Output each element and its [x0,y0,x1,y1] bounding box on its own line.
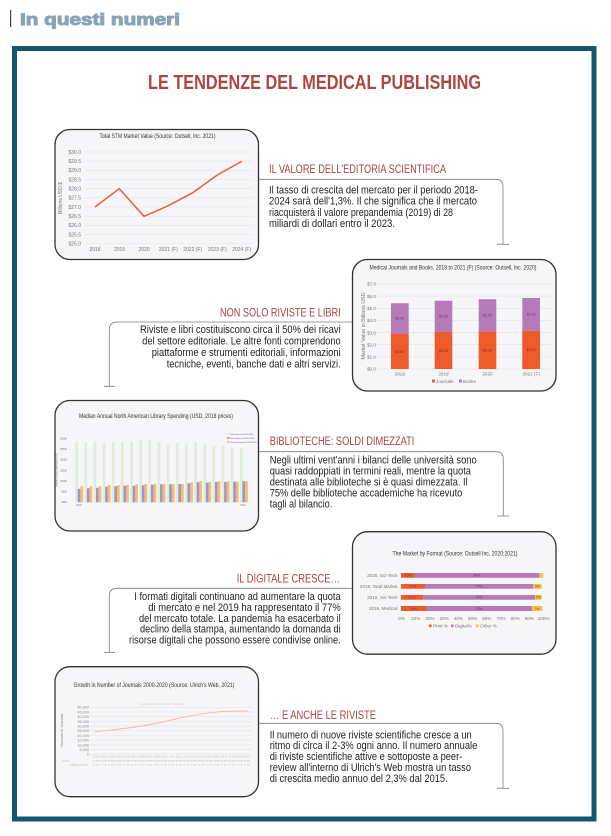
stacked horizontal bar chart [360,573,549,629]
stacked horizontal bar chart: 18% [410,607,417,611]
stacked bar chart: $2.0 [367,342,376,347]
line chart: 2021 (F) [159,247,178,253]
grouped bar chart: $1000 [60,480,68,483]
line chart with data table: 30,000 [77,724,89,728]
stacked horizontal bar chart: 6% [535,585,540,589]
text block: e anche le riviste: … E ANCHE LE RIVISTE [270,708,376,722]
stacked horizontal bar chart: 70% [496,616,506,621]
line chart: $29.0 [68,168,81,174]
line chart: $27.5 [68,196,81,202]
line chart with data table: 25,000 [77,729,89,733]
stacked horizontal bar chart: 50% [468,616,477,621]
text block: il digitale cresce: IL DIGITALE CRESCE… [237,571,340,585]
stacked horizontal bar chart: 10% [405,574,411,578]
stacked bar chart: $6.0 [367,294,376,299]
text block: il digitale cresce [104,571,352,652]
text block: biblioteche: destinata alle biblioteche si è quasi dimezzata. Il [270,476,468,488]
stacked horizontal bar chart: 2020, Sci-Tech [367,573,398,578]
text block: e anche le riviste: Il numero di nuove riviste scientifiche cresce a un [270,729,472,741]
stacked bar chart: 2020 [482,372,493,376]
line chart: 2019 [114,247,125,253]
line chart with data table: Journals [62,760,70,762]
legend: Journals [436,379,454,384]
stacked bar chart: $3.22 [527,348,536,352]
stacked bar chart: $2.59 [439,314,448,318]
title: LE TENDENZE DEL MEDICAL PUBLISHING [148,72,481,94]
line chart with data table: 5,000 [79,748,89,752]
stacked horizontal bar chart: 77% [476,585,482,589]
line chart with data table: 20,000 [77,734,89,738]
grouped bar chart: Median Annual Spending (USD) [56,453,58,487]
stacked horizontal bar chart: 30% [440,616,449,621]
stacked horizontal bar chart: 80% [511,616,520,621]
line chart: 2022 (F) [183,247,202,253]
line chart with data table: 45,000 [77,710,89,714]
line chart with data table: 15,000 [77,739,89,743]
line chart: $25.0 [68,241,81,247]
stacked bar chart: $3.10 [483,348,492,352]
stacked horizontal bar chart: 40% [454,616,463,621]
stacked horizontal bar chart: 20% [425,616,435,621]
text block: il valore dell'editoria scientifica: riacquisterà il valore prepandemia (2019) di 28 [269,207,453,219]
panel: journals and books chart [352,260,556,391]
text block: il digitale cresce: declino della stampa, aumentando la domanda di [140,624,341,636]
grouped bar chart: $000 [62,501,68,504]
panel: growth in number of journals chart [55,667,258,797]
text block: biblioteche [259,434,509,516]
text block: non solo riviste e libri: tecniche, eventi, banche dati e altri servizi. [167,358,341,370]
stacked bar chart: $3.0 [367,330,376,335]
text block: non solo riviste e libri: piattaforme e strumenti editoriali, informazioni [152,347,341,359]
line chart: 2020 [138,247,150,253]
stacked horizontal bar chart: 0% [398,616,405,621]
line chart: 2018 [89,247,101,253]
line chart: $27.0 [68,205,81,211]
stacked horizontal bar chart: 90% [525,616,534,621]
grouped bar chart: $2000 [60,458,68,462]
stacked bar chart: $2.53 [395,316,404,320]
text block: biblioteche: tagli al bilancio. [270,498,332,510]
line chart with data table: Growth in Number of Journals [140,703,184,706]
stacked horizontal bar chart: 2019, Sci-Tech [367,595,398,600]
stacked bar chart [361,282,552,384]
stacked bar chart: $2.70 [527,312,536,316]
stacked bar chart: $5.0 [367,306,376,311]
line chart with data table [60,703,252,766]
stacked bar chart: 2019 [438,372,449,376]
line chart with data table: 50,000 [77,706,89,710]
grouped bar chart: $1500 [60,470,68,472]
grouped bar chart: $2500 [60,448,68,451]
stacked horizontal bar chart: 17% [410,585,416,589]
stacked bar chart: $3.00 [439,349,448,353]
text block: biblioteche: BIBLIOTECHE: SOLDI DIMEZZATI [270,434,414,448]
stacked horizontal bar chart: 5% [536,596,541,600]
stacked bar chart: $7.0 [367,282,376,287]
line chart with data table: 0 [87,753,89,757]
stacked bar chart: Market Value in Billions USD [361,292,367,360]
legend: Serial Spend (2018 USD) [230,437,255,440]
stacked bar chart: $2.65 [483,314,492,318]
text block: il digitale cresce: I formati digitali continuano ad aumentare la quota [134,591,341,603]
text block: biblioteche: 75% delle biblioteche accademiche ha ricevuto [270,487,462,499]
line chart: $26.5 [68,214,81,220]
text block: non solo riviste e libri: del settore editoriale. Le altre fonti comprendono [142,336,341,348]
legend [429,624,497,629]
grouped bar chart: 2019 [240,504,246,507]
text block: e anche le riviste: ritmo di circa il 2-3% ogni anno. Il numero annuale [270,740,477,752]
line chart: $29.5 [68,159,81,165]
panel: market value chart [55,130,258,260]
line chart: Billions USD $ [58,182,64,214]
line chart: $28.0 [68,186,81,192]
line chart: $26.0 [68,223,81,229]
line chart with data table: 10,000 [77,743,89,747]
grouped bar chart: $3000 [60,438,68,440]
text block: non solo riviste e libri: Riviste e libri costituiscono circa il 50% dei ricavi [140,324,341,336]
stacked horizontal bar chart: 10% [411,616,420,621]
stacked bar chart: 2018 [395,372,405,376]
line chart [58,150,253,253]
stacked horizontal bar chart: 84% [474,574,480,578]
legend: Content Spend (2018 USD) [230,441,257,444]
text block: biblioteche: Negli ultimi vent'anni i bilanci delle università sono [270,454,477,466]
text block: il valore dell'editoria scientifica: 2024 sarà dell'1,3%. Il che significa che il mercato [269,196,477,208]
legend: Books [463,379,476,384]
stacked bar chart: $0.0 [367,367,376,372]
stacked horizontal bar chart: 7% [535,607,539,611]
text block: e anche le riviste: review all'interno di Ulrich's Web mostra un tasso [270,762,471,774]
text block: non solo riviste e libri [104,306,352,386]
section header: In questi numeri [20,10,180,29]
stacked horizontal bar chart: 2019, Total Market [360,584,398,589]
text block: il valore dell'editoria scientifica: miliardi di dollari entro il 2023. [269,218,395,230]
text block: il valore dell'editoria scientifica [259,162,509,244]
text block: non solo riviste e libri: NON SOLO RIVISTE E LIBRI [220,306,341,320]
line chart with data table: 35,000 [77,720,89,724]
legend: Total Spend (2018 USD) [230,433,254,436]
line chart with data table: 40,000 [77,715,89,719]
text block: il digitale cresce: del mercato totale. La pandemia ha esacerbato il [139,613,341,625]
stacked bar chart: $1.0 [367,355,376,360]
stacked horizontal bar chart: 100% [538,616,549,621]
text block: il digitale cresce: risorse digitali che possono essere condivise online. [129,634,341,646]
text block: il valore dell'editoria scientifica: Il tasso di crescita del mercato per il periodo 2018- [269,184,478,196]
stacked horizontal bar chart: 75% [476,607,482,611]
panel: market by format chart [352,532,556,654]
line chart with data table: Number of Journals [60,713,64,747]
stacked horizontal bar chart: 2019, Medical [369,606,398,611]
text block: biblioteche: quasi raddoppiati in termini reali, mentre la quota [270,465,471,477]
chart title: Medical Journals and Books, 2018 to 2021 (F) (Source: Outsell, Inc. 2020) [370,266,537,272]
chart title: The Market by Format (Source: Outsell Inc, 2020;2021) [392,552,518,558]
grouped bar chart [56,433,257,507]
stacked bar chart: $4.0 [367,318,376,323]
line chart with data table: 2.8% 2.9% 2.4% 2.4% 2.7% 2.6% 2.9% 2.8% 3.8% 4.3% 4.2% 4.3% 4.1% 4.0% 3.5% 3.7% 3.8% 3.9% 3.3% 2.7% 2.4% [93,764,250,766]
text block: e anche le riviste: di riviste scientifiche attive e sottoposte a peer- [270,751,463,763]
legend: Other % [480,624,497,629]
stacked bar chart: $2.86 [395,350,404,354]
stacked horizontal bar chart: 15% [409,596,415,600]
stacked bar chart: 2021 (F) [523,372,540,376]
chart title: Growth in Number of Journals 2000-2020 (Source: Ulrich's Web, 2021) [74,683,235,689]
legend: Print % [433,624,448,629]
grouped bar chart: 2000 [76,504,82,507]
line chart: $25.5 [68,232,81,238]
line chart: $30.0 [68,150,81,156]
line chart with data table: % Annual Growth % [70,763,88,766]
chart title: Median Annual North American Library Spending (USD, 2018 prices) [79,414,233,420]
legend [227,433,257,444]
line chart with data table: 24,000 24,700 25,300 25,900 26,600 27,300 28,100 28,900 30,000 31,300 32,600 34,000 35,400 36,800 38,100 39,500 41,000 42,600 44,000 45,200 46,300 [93,760,251,762]
text block: e anche le riviste [259,708,509,788]
panel: library spending chart [55,400,258,531]
legend: Digital% [455,624,472,629]
line chart: 2024 (F) [232,247,251,253]
legend [432,379,476,384]
stacked horizontal bar chart: 79% [476,596,482,600]
chart title: Total STM Market Value (Source: Outsell, Inc. 2021) [100,134,216,140]
line chart: 2023 (F) [208,247,227,253]
line chart with data table: 2000 2001 2002 2003 2004 2005 2006 2007 2008 2009 2010 2011 2012 2013 2014 2015 2016 2017 2018 2019 2020 [93,756,251,758]
line chart: $28.5 [68,177,81,183]
text block: il digitale cresce: di mercato e nel 2019 ha rappresentato il 77% [148,602,341,614]
text block: e anche le riviste: di crescita medio annuo del 2,3% dal 2015. [270,773,448,785]
grouped bar chart: $500 [62,490,68,494]
text block: il valore dell'editoria scientifica: IL VALORE DELL'EDITORIA SCIENTIFICA [269,162,446,176]
stacked horizontal bar chart: 60% [482,616,491,621]
